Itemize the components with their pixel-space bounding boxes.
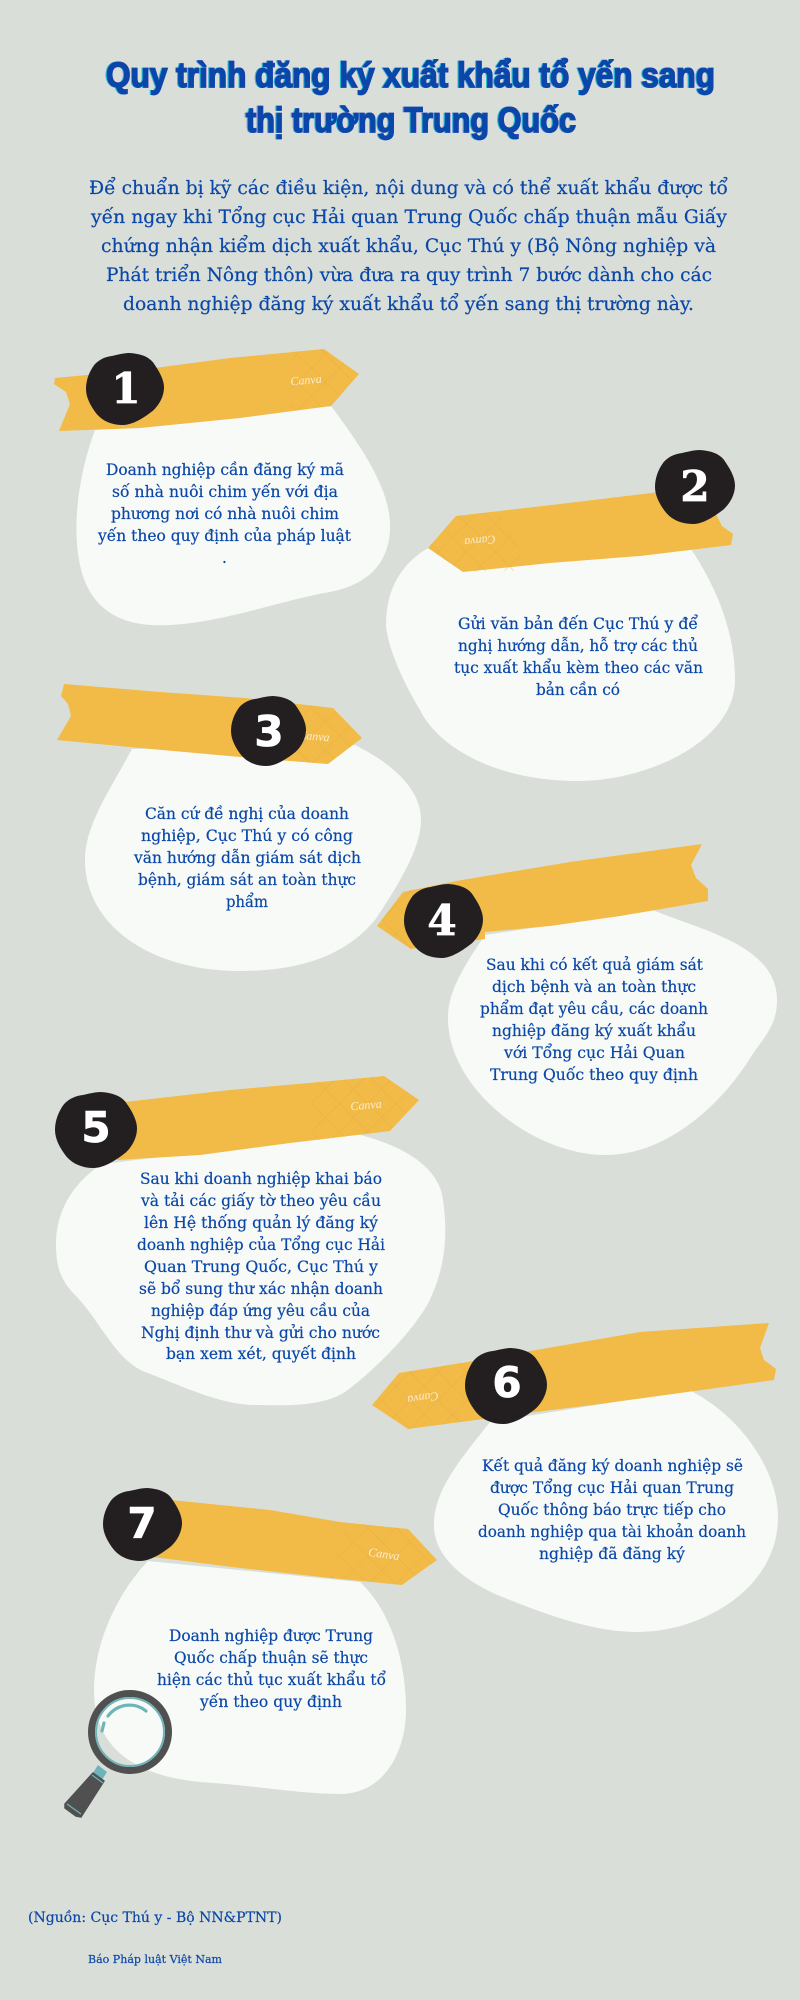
text step 7: yến theo quy định (199, 1693, 342, 1711)
badge 6 (465, 1348, 547, 1424)
intro paragraph: Phát triển Nông thôn) vừa đưa ra quy trình 7 bước dành cho các (106, 264, 712, 286)
ribbon 3 (57, 684, 362, 764)
ribbon 1: Canva (290, 372, 322, 388)
text step 2: Gửi văn bản đến Cục Thú y để (458, 615, 698, 633)
text step 5: doanh nghiệp của Tổng cục Hải (137, 1236, 385, 1254)
intro paragraph: doanh nghiệp đăng ký xuất khẩu tổ yến sang thị trường này. (123, 293, 694, 315)
badge 2 (655, 450, 735, 524)
badge 6: 6 (492, 1358, 522, 1407)
source note: (Nguồn: Cục Thú y - Bộ NN&PTNT) (28, 1909, 282, 1926)
intro paragraph (89, 177, 728, 315)
badge 1 (86, 353, 164, 425)
text step 3: nghiệp, Cục Thú y có công (141, 827, 353, 845)
badge 2: 2 (680, 462, 710, 511)
text step 7: Quốc chấp thuận sẽ thực (174, 1649, 368, 1667)
ribbon 1 (54, 349, 359, 431)
text step 7: Doanh nghiệp được Trung (169, 1627, 373, 1645)
text step 4 (480, 956, 708, 1084)
text step 4: với Tổng cục Hải Quan (503, 1044, 685, 1062)
text step 5: Sau khi doanh nghiệp khai báo (140, 1170, 382, 1188)
text step 3 (133, 805, 361, 911)
text step 4: dịch bệnh và an toàn thực (492, 978, 696, 996)
text step 3: phẩm (226, 893, 268, 911)
panel: step 6 (372, 1323, 778, 1632)
text step 5: sẽ bổ sung thư xác nhận doanh (139, 1280, 383, 1298)
badge 3: 3 (254, 707, 284, 756)
text step 3: văn hướng dẫn giám sát dịch (133, 849, 361, 867)
badge 5: 5 (81, 1103, 111, 1152)
icon: magnifying glass (65, 1694, 168, 1817)
ribbon 5 (117, 1076, 419, 1160)
text step 1: Doanh nghiệp cần đăng ký mã (106, 461, 344, 479)
text step 5: Nghị định thư và gửi cho nước (141, 1324, 380, 1342)
title: thị trường Trung Quốc (246, 101, 576, 140)
badge 3 (231, 696, 306, 766)
ribbon 3: Canva (298, 728, 330, 744)
text step 2: tục xuất khẩu kèm theo các văn (454, 659, 703, 677)
title: Quy trình đăng ký xuất khẩu tổ yến sang (106, 56, 715, 95)
text step 5: bạn xem xét, quyết định (166, 1345, 356, 1363)
ribbon 2 (428, 488, 733, 572)
title (106, 56, 715, 140)
ribbon 2: Canva (464, 532, 496, 550)
badge 5 (55, 1092, 137, 1168)
text step 6: Kết quả đăng ký doanh nghiệp sẽ (482, 1457, 743, 1475)
text step 1: phương nơi có nhà nuôi chim (111, 505, 339, 523)
badge 7 (103, 1488, 182, 1561)
text step 5: và tải các giấy tờ theo yêu cầu (140, 1192, 381, 1210)
ribbon 6: Canva (407, 1389, 439, 1407)
text step 3: bệnh, giám sát an toàn thực (138, 871, 356, 889)
text step 1: số nhà nuôi chim yến với địa (112, 483, 338, 501)
ribbon 4 (377, 844, 708, 949)
panel: step 2 (386, 450, 735, 781)
text step 6: được Tổng cục Hải quan Trung (490, 1479, 734, 1497)
badge 4 (404, 884, 483, 958)
text step 1: yến theo quy định của pháp luật (97, 527, 352, 545)
text step 6: nghiệp đã đăng ký (539, 1545, 685, 1563)
intro paragraph: chứng nhận kiểm dịch xuất khẩu, Cục Thú y (Bộ Nông nghiệp và (101, 235, 716, 257)
badge 7: 7 (127, 1499, 157, 1548)
text step 6: doanh nghiệp qua tài khoản doanh (478, 1523, 746, 1541)
badge 1: 1 (111, 364, 141, 413)
ribbon 5: Canva (350, 1097, 382, 1113)
text step 5: nghiệp đáp ứng yêu cầu của (151, 1302, 370, 1320)
badge 4: 4 (427, 896, 457, 945)
text step 5: lên Hệ thống quản lý đăng ký (144, 1214, 378, 1232)
text step 2: nghị hướng dẫn, hỗ trợ các thủ (458, 637, 698, 655)
text step 3: Căn cứ đề nghị của doanh (145, 805, 349, 823)
text step 6: Quốc thông báo trực tiếp cho (498, 1501, 726, 1519)
ribbon 6 (372, 1323, 776, 1429)
text step 5: Quan Trung Quốc, Cục Thú y (144, 1258, 378, 1276)
text step 1: . (222, 549, 227, 567)
intro paragraph: yến ngay khi Tổng cục Hải quan Trung Quốc chấp thuận mẫu Giấy (90, 206, 728, 228)
text step 4: Trung Quốc theo quy định (490, 1066, 698, 1084)
text step 2: bản cần có (536, 681, 620, 699)
publisher credit: Báo Pháp luật Việt Nam (88, 1953, 223, 1966)
text step 6 (478, 1457, 746, 1563)
ribbon 7: Canva (368, 1545, 400, 1563)
panel: step 7 (94, 1488, 437, 1794)
text step 4: phẩm đạt yêu cầu, các doanh (480, 1000, 708, 1018)
intro paragraph: Để chuẩn bị kỹ các điều kiện, nội dung và có thể xuất khẩu được tổ (89, 177, 728, 199)
panel: step 4 (377, 844, 777, 1155)
panel: step 3 (57, 684, 421, 971)
panel: step 5 (55, 1076, 445, 1405)
text step 4: Sau khi có kết quả giám sát (486, 956, 704, 974)
text step 2 (454, 615, 703, 699)
text step 1 (97, 461, 352, 567)
text step 7 (157, 1627, 386, 1711)
text step 5 (137, 1170, 385, 1363)
ribbon 7 (153, 1500, 437, 1585)
panel: step 1 (54, 349, 390, 625)
text step 4: nghiệp đăng ký xuất khẩu (492, 1022, 696, 1040)
text step 7: hiện các thủ tục xuất khẩu tổ (157, 1671, 386, 1689)
